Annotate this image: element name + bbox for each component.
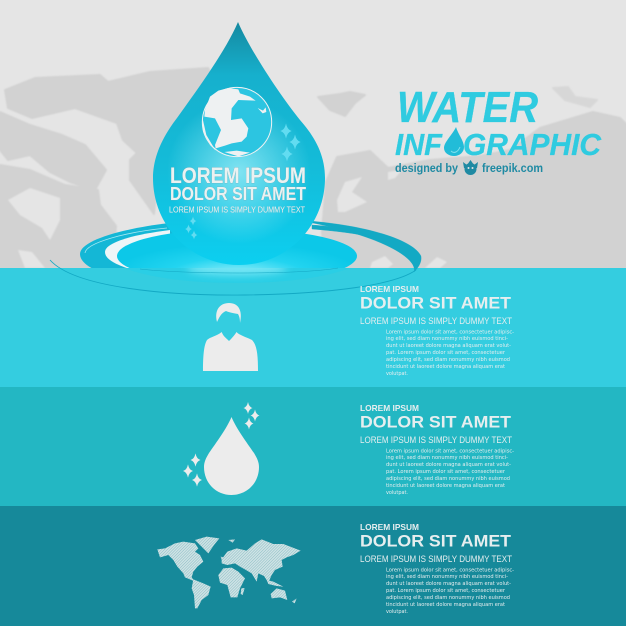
drop heading (169, 163, 306, 214)
text block: section 3: tincidunt ut laoreet dolore magna aliquam erat (386, 602, 505, 608)
text block: section 3: dunt ut laoreet dolore magna aliquam erat volut- (386, 581, 511, 587)
text block: section 2: LOREM IPSUM IS SIMPLY DUMMY TEXT (360, 435, 512, 446)
band 3 (0, 506, 626, 626)
background world map (0, 68, 626, 268)
title: WATER (397, 83, 538, 132)
icon: freepik logo (463, 160, 478, 175)
text block: section 2: volutpat. (386, 490, 408, 496)
text block: section 1: adipiscing elit, sed diam nonummy nibh euismod (386, 357, 510, 363)
text block: section 2: tincidunt ut laoreet dolore magna aliquam erat (386, 483, 505, 489)
text block: section 2: LOREM IPSUM (360, 403, 419, 413)
text block: section 1: tincidunt ut laoreet dolore magna aliquam erat (386, 364, 505, 370)
pool reflection (126, 268, 348, 283)
text block: section 3 (360, 522, 514, 615)
text block: section 1: volutpat. (386, 371, 408, 377)
credit: freepik.com (482, 163, 543, 175)
text block: section 2: Lorem ipsum dolor sit amet, consectetuer adipisc- (386, 448, 514, 454)
band 2 (0, 387, 626, 506)
text block: section 1: Lorem ipsum dolor sit amet, consectetuer adipisc- (386, 330, 514, 336)
text block: section 1 (360, 284, 514, 377)
text block: section 1: DOLOR SIT AMET (360, 294, 512, 312)
text block: section 2: pat. Lorem ipsum dolor sit amet, consectetuer (386, 469, 506, 475)
band 1 (0, 268, 626, 387)
text block: section 2 (360, 403, 514, 496)
globe icon (202, 87, 272, 157)
sparkles (185, 124, 301, 240)
credit (395, 160, 543, 175)
text block: section 2: ing elit, sed diam nonummy nibh euismod tinci- (386, 455, 508, 461)
water drop (153, 22, 325, 265)
text block: section 1: LOREM IPSUM (360, 284, 419, 294)
title: INF (395, 127, 443, 162)
text block: section 3: volutpat. (386, 609, 408, 615)
text block: section 3: Lorem ipsum dolor sit amet, consectetuer adipisc- (386, 568, 514, 574)
credit: designed by (395, 163, 459, 175)
text block: section 1: ing elit, sed diam nonummy nibh euismod tinci- (386, 336, 508, 342)
text block: section 3: LOREM IPSUM (360, 522, 419, 532)
text block: section 2: adipiscing elit, sed diam nonummy nibh euismod (386, 476, 510, 482)
text block: section 3: adipiscing elit, sed diam nonummy nibh euismod (386, 595, 510, 601)
title (395, 83, 602, 162)
text block: section 3: LOREM IPSUM IS SIMPLY DUMMY TEXT (360, 554, 512, 565)
light land gaps (8, 170, 447, 268)
text block: section 1: pat. Lorem ipsum dolor sit amet, consectetuer (386, 350, 506, 356)
text block: section 3: DOLOR SIT AMET (360, 532, 512, 550)
title: GRAPHIC (463, 127, 602, 162)
ripple lines (50, 221, 421, 295)
text block: section 3: ing elit, sed diam nonummy nibh euismod tinci- (386, 574, 508, 580)
drop heading: LOREM IPSUM (170, 163, 306, 188)
icon: water drop with sparkles (183, 402, 260, 495)
text block: section 3: pat. Lorem ipsum dolor sit amet, consectetuer (386, 588, 506, 594)
icon: title drop (444, 127, 464, 156)
ripple: water pool (80, 224, 357, 268)
text block: section 2: dunt ut laoreet dolore magna aliquam erat volut- (386, 462, 511, 468)
text block: section 1: LOREM IPSUM IS SIMPLY DUMMY TEXT (360, 316, 512, 327)
drop heading: LOREM IPSUM IS SIMPLY DUMMY TEXT (169, 204, 305, 214)
icon: striped world map (157, 537, 301, 608)
text block: section 1: dunt ut laoreet dolore magna aliquam erat volut- (386, 343, 511, 349)
icon: person (203, 303, 258, 371)
drop heading: DOLOR SIT AMET (170, 184, 306, 204)
text block: section 2: DOLOR SIT AMET (360, 412, 512, 432)
